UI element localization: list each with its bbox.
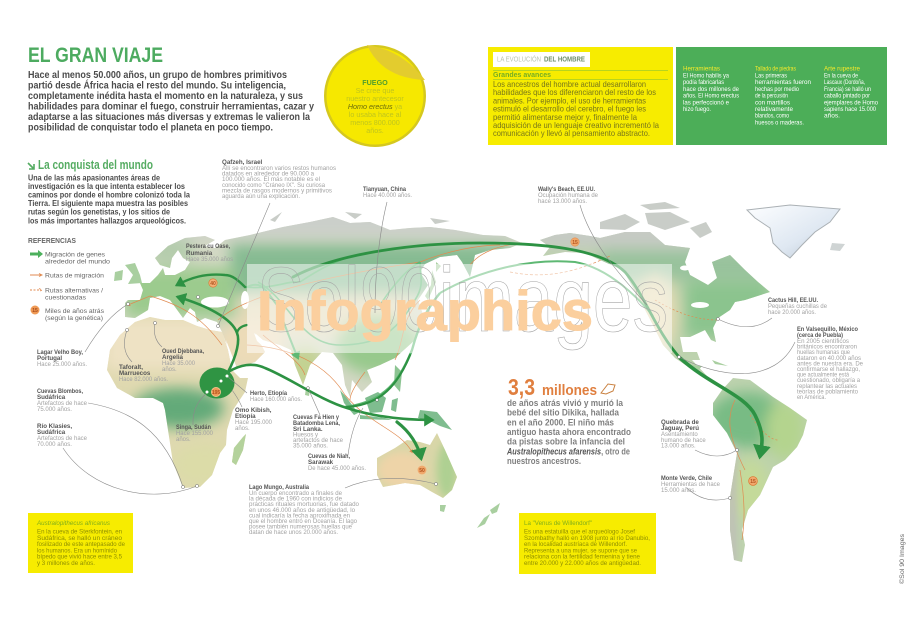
label: Herto: Hace 160.000 años.: [250, 397, 302, 403]
label: Monte Verde: Herramientas de hace: [661, 482, 721, 488]
label: Lago Mungo: posee también numerosas huellas que: [249, 525, 353, 531]
panel: la evolución del hombre: adquisición de un lenguaje creativo incrementó la: [493, 120, 659, 130]
sticker: fuego: lo usaba hace al: [349, 110, 402, 119]
label: Tianyuan: Hace 40.000 años.: [363, 193, 412, 199]
label: Valsequillo: cuestionado, obligaría a: [797, 378, 861, 384]
label: Cuevas de Niah: Cuevas de Niah,: [308, 453, 350, 460]
column: herramientas: Herramientas: [683, 66, 720, 73]
label: Lago Mungo: que el hombre entró en Oceanía. El lago: [249, 519, 358, 525]
label: Lago Mungo: la década de 1960 con indicios de: [249, 497, 343, 503]
panel: australopithecus africanus: En la cueva de Sterkfontein, en: [37, 530, 122, 536]
callout: 3,3 millones: millones: [542, 382, 597, 399]
label: Quebrada de Jaguay: Jaguay, Perú: [661, 425, 699, 432]
intro text: adaptarse a las situaciones más diversas y extremas le valieron la: [28, 112, 310, 123]
label: Quebrada de Jaguay: [661, 419, 706, 450]
label: Wally's Beach: [538, 186, 599, 205]
panel: venus de willendorf: La "Venus de Willendorf": [524, 520, 592, 527]
text: conquista intro: [28, 172, 190, 225]
label: Valsequillo: antes de nuestra era. De: [797, 361, 864, 367]
sticker: fuego: nuestro antecesor: [346, 94, 404, 103]
text: conquista intro: rutas según los genetistas, y los sitios de: [28, 207, 170, 217]
greenland: [747, 205, 840, 258]
label: Cactus Hill: [768, 297, 828, 316]
panel: australopithecus africanus: [28, 513, 133, 573]
column: arte rupestre: Lascaux (Dordoña,: [824, 79, 865, 86]
legend item: rutas alternativas: [30, 288, 103, 302]
column: arte rupestre: En la cueva de: [824, 72, 858, 80]
panel: venus de willendorf: Es una estatuilla que el arqueólogo Josef: [524, 530, 635, 536]
label: Pestera cu Oase: [186, 243, 233, 263]
label: Wally's Beach: Wally's Beach, EE.UU.: [538, 186, 595, 193]
label: Lagar Velho: [37, 349, 87, 368]
age markers: 50: [419, 468, 425, 474]
label: Valsequillo: que actualmente está: [797, 373, 850, 379]
legend: referencias: [28, 236, 110, 322]
iceland: [830, 243, 845, 251]
label: Lagar Velho: Hace 25.000 años.: [37, 362, 87, 368]
land: arctic islands: [270, 202, 712, 238]
label: Valsequillo: [797, 326, 864, 401]
legend item: rutas alternativas: cuestionadas: [45, 294, 86, 302]
label: Valsequillo: teorías de poblamiento: [797, 389, 859, 395]
label: Cuevas de Niah: Sarawak: [308, 459, 334, 466]
label: Valsequillo: replantear las actuales: [797, 384, 857, 390]
label: Valsequillo: En Valsequillo, México: [797, 326, 858, 333]
panel: australopithecus africanus: y 3 millones de años.: [37, 561, 95, 567]
heading: la conquista del mundo: La conquista del mundo: [38, 158, 153, 172]
label: Singa: Singa, Sudán: [176, 424, 211, 431]
column: tallado de piedras: con martillos: [755, 99, 790, 106]
label: Quebrada de Jaguay: 13.000 años.: [661, 444, 696, 450]
panel: australopithecus africanus: Sudáfrica, se halló un cráneo: [37, 536, 123, 542]
text: conquista intro: los más importantes hallazgos arqueológicos.: [28, 215, 186, 225]
callout: 3,3 millones: bebé del sitio Dikika, hallada: [507, 408, 620, 419]
panel: la evolución del hombre: Los ancestros del hombre actual desarrollaron: [493, 79, 646, 89]
column: herramientas: El Homo habilis ya: [683, 72, 729, 80]
callout: 3,3 millones: antiguo hasta ahora encontrado: [507, 427, 631, 438]
label: Cuevas Blombos: Artefactos de hace: [37, 401, 88, 407]
label: Omo Kibish: [235, 407, 273, 432]
label: Valsequillo: huellas humanas que: [797, 350, 851, 356]
panel: la evolución del hombre: DEL HOMBRE: [544, 56, 585, 64]
label: Pestera cu Oase: Hace 35.000 años: [186, 257, 233, 263]
label: Quebrada de Jaguay: Asentamiento: [661, 432, 698, 438]
label: Pestera cu Oase: Pestera cu Oase,: [186, 243, 230, 250]
label: Quebrada de Jaguay: Quebrada de: [661, 419, 699, 426]
age markers: 15: [572, 240, 578, 246]
column: arte rupestre: Francia) se halló un: [824, 86, 871, 93]
intro text: posibilidad de conquistar todo el planeta en poco tiempo.: [28, 122, 273, 133]
label: Río Klasies: 70.000 años.: [37, 442, 72, 448]
leader lines: [63, 202, 795, 500]
text: conquista intro: caminos por donde el hombre colonizó toda la: [28, 189, 190, 199]
column: tallado de piedras: [755, 66, 811, 126]
label: Omo Kibish: Hace 195.000: [235, 420, 273, 426]
label: Lago Mungo: Lago Mungo, Australia: [249, 484, 309, 491]
label: Río Klasies: [37, 423, 88, 448]
sticker: fuego: menos 800.000: [350, 118, 400, 127]
label: Cuevas Fa Hien: [293, 414, 344, 450]
label: Cuevas de Niah: [308, 453, 366, 472]
inland seas: [201, 266, 709, 366]
label: Oued Djebbana: [162, 348, 204, 373]
legend item: rutas de migración: Rutas de migración: [45, 272, 104, 280]
label: Tianyuan: Tianyuan, China: [363, 186, 406, 193]
label: Lagar Velho: Lagar Velho Boy,: [37, 349, 83, 356]
label: Cuevas Fa Hien: artefactos de hace: [293, 438, 344, 444]
text: conquista intro: investigación es la que intenta establecer los: [28, 181, 185, 191]
label: Río Klasies: Río Klasies,: [37, 423, 72, 430]
label: Singa: años.: [176, 437, 191, 443]
african origin blob: [200, 368, 234, 398]
label: Qafzeh: [222, 159, 336, 200]
column: arte rupestre: caballo pintado por: [824, 93, 870, 100]
panel: la evolución del hombre: [488, 47, 673, 145]
column: tallado de piedras: huesos o maderas.: [755, 119, 804, 126]
panel: venus de willendorf: relaciona con la fertilidad femenina y tiene: [524, 555, 641, 561]
label: Taforalt: [119, 364, 168, 383]
panel: australopithecus africanus: fosilizado de este antepasado de: [37, 542, 126, 548]
label: Wally's Beach: Ocupación humana de: [538, 193, 599, 199]
label: Cuevas Blombos: Cuevas Blombos,: [37, 388, 83, 395]
column: herramientas: hace dos millones de: [683, 86, 739, 93]
label: Valsequillo: en América.: [797, 395, 826, 401]
intro text: partió desde África hacia el resto del mundo. Su inteligencia,: [28, 78, 286, 91]
watermark: Infographics: [257, 279, 593, 342]
age markers: 15: [750, 479, 756, 485]
panel: australopithecus africanus: los humanos. Era un homínido: [37, 548, 118, 554]
label: Tianyuan: [363, 186, 412, 199]
column: tallado de piedras: herramientas fueron: [755, 79, 811, 86]
label: Valsequillo: En 2005 científicos: [797, 339, 849, 345]
column: herramientas: años. El Homo erectus: [683, 93, 739, 100]
panel: la evolución del hombre: permitió alimentarse mejor y, finalmente la: [493, 112, 637, 122]
label: Qafzeh: datados en alrededor de 90.000 a: [222, 172, 315, 178]
column: herramientas: [683, 66, 739, 113]
credit: ©Sol 90 Images: [898, 533, 906, 584]
title: EL GRAN VIAJE: [28, 44, 163, 67]
column: tallado de piedras: relativamente: [755, 106, 793, 113]
panel: la evolución del hombre: animales. Por ejemplo, el uso de herramientas: [493, 95, 646, 105]
legend item: miles de años: [30, 306, 104, 322]
intro text: completamente inédita hasta el momento en la naturaleza, y sus: [28, 91, 303, 102]
thin orange routes: [128, 243, 778, 540]
label: Cuevas Blombos: Sudáfrica: [37, 394, 66, 401]
label: Río Klasies: Sudáfrica: [37, 429, 66, 436]
age markers: 195: [212, 390, 220, 396]
text: conquista intro: Una de las más apasionantes áreas de: [28, 172, 160, 182]
intro text: [28, 70, 314, 133]
label: Cuevas Fa Hien: 35.000 años.: [293, 444, 328, 450]
column: arte rupestre: sapiens hace 15.000: [824, 106, 876, 113]
label: Qafzeh: aguarda aún una explicación.: [222, 194, 300, 200]
label: Oued Djebbana: Hace 35.000: [162, 361, 196, 367]
watermark: Sol90images: [257, 249, 668, 351]
panel: australopithecus africanus: Australopithecus africanus: [36, 520, 110, 527]
label: Cuevas Fa Hien: Cuevas Fa Hien y: [293, 414, 339, 421]
panel: green columns: [676, 47, 887, 145]
label: Río Klasies: Artefactos de hace: [37, 436, 88, 442]
panel: la evolución del hombre: Grandes avances: [493, 70, 551, 79]
migration routes: thick arrows: [177, 243, 762, 458]
watermark overlay: [247, 264, 672, 353]
age markers: 40: [210, 281, 216, 287]
label: Cuevas Blombos: [37, 388, 88, 413]
panel: australopithecus africanus: bípedo que vivió hace entre 3,5: [37, 555, 123, 561]
callout: 3,3 millones: da pistas sobre la infancia del: [507, 437, 625, 448]
label: Cuevas Fa Hien: Batadomba Lena,: [293, 420, 340, 427]
column: tallado de piedras: hechas por medio: [755, 86, 799, 93]
column: arte rupestre: Arte rupestre: [824, 66, 860, 73]
column: tallado de piedras: Las primeras: [755, 72, 787, 80]
column: arte rupestre: años.: [824, 113, 840, 120]
label: Oued Djebbana: Oued Djebbana,: [162, 348, 204, 355]
legend item: genes: Migración de genes: [45, 252, 105, 258]
label: Omo Kibish: Etiopía: [235, 413, 256, 420]
label: Omo Kibish: Omo Kibish,: [235, 407, 272, 414]
label: Monte Verde: [661, 475, 721, 494]
age markers: [209, 238, 757, 485]
label: Herto: Herto, Etiopía: [250, 390, 288, 397]
label: Cuevas Fa Hien: Sri Lanka.: [293, 426, 323, 433]
label: Cactus Hill: Pequeñas cuchillas de: [768, 304, 828, 310]
label: Pestera cu Oase: Rumania: [186, 250, 213, 257]
label: Wally's Beach: hace 13.000 años.: [538, 199, 587, 205]
label: Cuevas Blombos: 75.000 años.: [37, 407, 72, 413]
label: Omo Kibish: años.: [235, 426, 250, 432]
column: tallado de piedras: blandos, como: [755, 113, 789, 120]
legend: referencias: REFERENCIAS: [28, 236, 76, 245]
label: Valsequillo: (cerca de Puebla): [797, 332, 843, 339]
intro text: Hace al menos 50.000 años, un grupo de hombres primitivos: [28, 70, 287, 81]
label: Lago Mungo: cual indicaría la fecha aproximada en: [249, 513, 350, 519]
label: Singa: [176, 424, 214, 443]
column: herramientas: hizo fuego.: [683, 106, 711, 113]
label: Lago Mungo: Un cuerpo encontrado a finales de: [249, 491, 343, 497]
label: Qafzeh: Qafzeh, Israel: [222, 159, 263, 166]
sticker: fuego: Se cree que: [356, 86, 394, 95]
callout: 3,3 millones: de años atrás vivió y murió la: [507, 398, 624, 409]
label: Lago Mungo: en unos 46.000 años de antigüedad, lo: [249, 508, 356, 514]
panel: venus de willendorf: en la localidad austríaca de Willendorf.: [524, 542, 627, 548]
label: Oued Djebbana: Argelia: [162, 354, 184, 361]
land: eurasia: [125, 217, 520, 397]
column: herramientas: podía fabricarlas: [683, 79, 724, 86]
label: Oued Djebbana: años.: [162, 367, 177, 373]
label: Monte Verde: Monte Verde, Chile: [661, 475, 713, 482]
column: tallado de piedras: de la percusión: [755, 93, 788, 100]
label: Lago Mungo: prácticas rituales mortuorias, fue datado: [249, 502, 360, 508]
callout: 3,3 millones: Australopithecus afarensis, otro de: [506, 446, 630, 457]
panel: la evolución del hombre: LA EVOLUCIÓN: [497, 54, 541, 64]
panel: la evolución del hombre: comunicación y llevó al pensamiento abstracto.: [493, 128, 650, 138]
land: africa: [107, 317, 248, 488]
panel: venus de willendorf: [519, 513, 656, 574]
panel: la evolución del hombre: habilidades que los diferenciaron del resto de los: [493, 87, 656, 97]
legend item: miles de años: Miles de años atrás: [45, 308, 104, 315]
column: arte rupestre: [824, 66, 878, 120]
label: Lagar Velho: Portugal: [37, 355, 62, 362]
label: Qafzeh: conocido como "Cráneo IX". Su curiosa: [222, 183, 326, 189]
label: Herto: [250, 390, 302, 403]
label: Cactus Hill: hace 20.000 años.: [768, 310, 816, 316]
label: Taforalt: Hace 82.000 años.: [119, 377, 168, 383]
callout: 3,3 millones: [506, 374, 631, 467]
world map: [63, 200, 845, 570]
column: tallado de piedras: Tallado de piedras: [755, 66, 796, 73]
panel: venus de willendorf: Representa a una mujer, se supone que se: [524, 548, 638, 554]
land: americas: [540, 232, 807, 562]
sticker: fuego: [324, 45, 426, 147]
label: Qafzeh: Allí se encontraron varios restos humanos: [222, 166, 336, 172]
callout: 3,3 millones: 3,3: [508, 374, 535, 400]
label: Lago Mungo: [249, 484, 360, 536]
label: Qafzeh: mezcla de rasgos modernos y primitivos: [222, 188, 332, 194]
intro text: habilidades para dominar el fuego, construir herramientas, cazar y: [28, 101, 314, 112]
legend item: rutas alternativas: Rutas alternativas /: [45, 288, 103, 294]
label: Lago Mungo: datan de hace unos 20.000 años.: [249, 530, 338, 536]
label: Valsequillo: dataron en 40.000 años: [797, 356, 861, 362]
label: Taforalt: Taforalt,: [119, 364, 143, 371]
land: australia: [377, 433, 457, 498]
label: Singa: Hace 155.000: [176, 431, 214, 437]
land: islands: [114, 262, 728, 528]
panel: venus de willendorf: entre 20.000 y 22.000 años de antigüedad.: [524, 561, 641, 567]
panel: la evolución del hombre: estimuló el desarrollo del cerebro, el fuego les: [493, 104, 646, 114]
legend item: miles de años: 15: [32, 308, 38, 314]
label: Cuevas de Niah: De hace 45.000 años.: [308, 466, 366, 472]
callout: 3,3 millones: en el año 2000. El niño más: [507, 417, 614, 428]
sticker: fuego: años.: [366, 126, 384, 135]
legend item: miles de años: (según la genética): [45, 315, 103, 322]
panel: venus de willendorf: Szombathy halló en 1908 junto al río Danubio,: [524, 536, 650, 542]
migration routes: pale arcs: [245, 254, 653, 407]
callout: 3,3 millones: nuestros ancestros.: [507, 456, 581, 467]
label: Qafzeh: 100.000 años. El más notable es el: [222, 177, 320, 183]
label: Valsequillo: confirmarse el hallazgo,: [797, 367, 860, 373]
legend item: genes: [30, 250, 110, 266]
sticker: fuego: FUEGO: [362, 78, 388, 87]
legend item: genes: alrededor del mundo: [45, 258, 110, 266]
icon: bone fragment: [601, 384, 615, 394]
column: arte rupestre: ejemplares de Homo: [824, 99, 878, 106]
sticker: fuego: Homo erectus ya: [348, 102, 402, 111]
text: conquista intro: Tierra. El siguiente mapa muestra las posibles: [28, 198, 188, 208]
label: Cactus Hill: Cactus Hill, EE.UU.: [768, 297, 818, 304]
site markers: [125, 295, 739, 500]
label: Cuevas Fa Hien: Huesos y: [293, 432, 318, 438]
label: Taforalt: Marruecos: [119, 370, 151, 377]
label: Monte Verde: 15.000 años.: [661, 488, 696, 494]
column: herramientas: las perfeccionó e: [683, 99, 729, 106]
label: Quebrada de Jaguay: humano de hace: [661, 438, 706, 444]
label: Valsequillo: británicos encontraron: [797, 345, 857, 351]
